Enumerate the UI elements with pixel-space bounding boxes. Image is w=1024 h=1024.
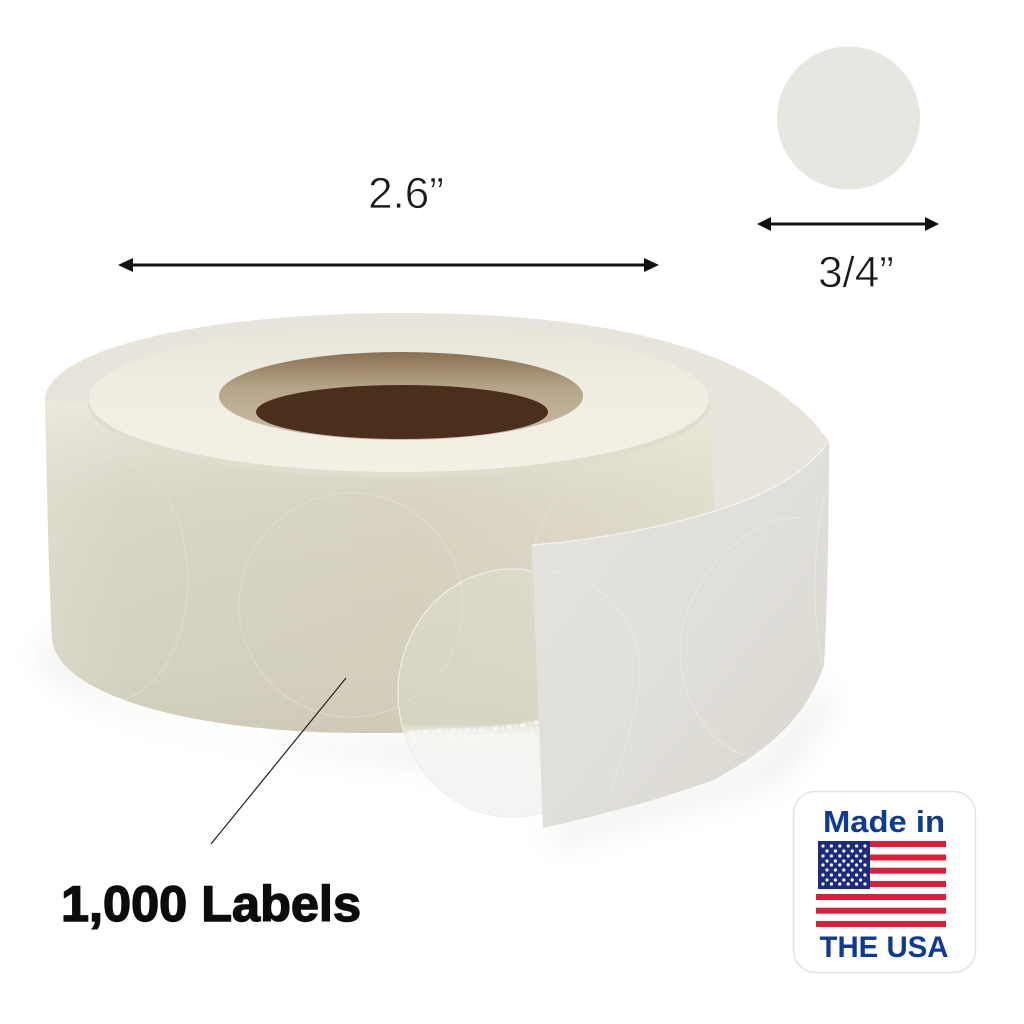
width arrow 2.6 in: [118, 258, 659, 272]
sticker outlines through liner: [545, 490, 826, 790]
arrow line: [763, 222, 933, 226]
flag stars: [823, 846, 868, 884]
flag stripes: [816, 841, 946, 927]
sample label circle: [777, 46, 920, 190]
flag: [816, 841, 946, 927]
Made in the USA badge: [794, 792, 976, 972]
callout label: 1,000 Labels: [61, 876, 361, 932]
peeled liner strip: [532, 440, 829, 828]
sticker outline right: [530, 501, 556, 570]
diameter dimension label: 3/4”: [818, 248, 894, 297]
peeled clear sticker: [398, 569, 626, 817]
outline on liner right: [680, 518, 800, 755]
width dimension label: 2.6”: [368, 169, 444, 218]
inner wound disk face: [89, 326, 709, 472]
core hole: [219, 352, 583, 440]
badge background: [794, 792, 976, 972]
diameter arrow 3/4 in: [757, 217, 939, 231]
cardboard core interior: [256, 385, 548, 439]
sticker outlines on roll: [123, 492, 556, 718]
outline on liner far right: [815, 490, 826, 665]
flag canton: [818, 841, 870, 889]
badge top text: Made in: [823, 804, 945, 839]
sticker glare band: [408, 722, 540, 740]
label roll: [28, 313, 828, 733]
arrow line: [124, 264, 653, 266]
inner wound disk edge: [88, 328, 710, 478]
liner top highlight: [532, 440, 829, 545]
roll floor shadow: [40, 630, 830, 845]
arrowheads: [757, 217, 939, 231]
callout line: [211, 678, 346, 844]
outline on liner left: [545, 570, 640, 790]
badge bottom text: THE USA: [820, 931, 948, 964]
arrowheads: [118, 258, 659, 272]
sticker disc: [398, 569, 626, 817]
side wall shading: [45, 400, 720, 733]
core inner opening: [256, 385, 548, 439]
sticker outline center: [239, 493, 463, 717]
outer liner top ring: [45, 313, 828, 560]
sticker outline left: [123, 505, 188, 700]
liner sheet: [532, 440, 829, 828]
roll side wall: [45, 400, 720, 733]
